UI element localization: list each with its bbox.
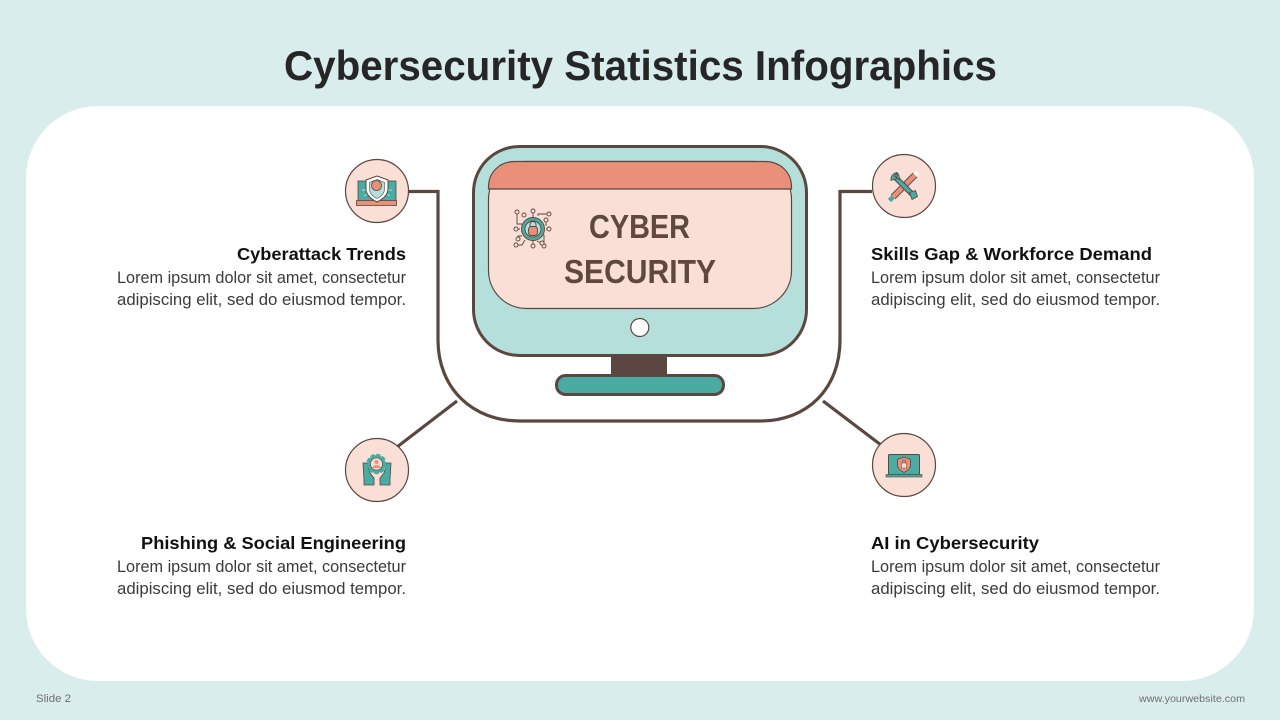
icon: hands holding gear: [346, 438, 408, 502]
monitor illustration: [474, 146, 806, 394]
text block: AI in Cybersecurity: [871, 533, 1160, 598]
panel: main white card: [26, 106, 1254, 681]
text block: Cyberattack Trends: Lorem ipsum dolor sit amet, consectetur: [117, 269, 406, 287]
text block: Cyberattack Trends: adipiscing elit, sed do eiusmod tempor.: [117, 291, 406, 309]
icon: laptop shield: [346, 160, 408, 222]
footer: slide number: Slide 2: [36, 693, 71, 705]
icon: laptop with padlock shield: [872, 434, 936, 496]
monitor body: [474, 146, 806, 356]
icon: circuit padlock: [514, 209, 551, 248]
power button: [631, 318, 649, 336]
text block: Skills Gap & Workforce Demand: Lorem ipsum dolor sit amet, consectetur: [871, 269, 1160, 287]
monitor stand base: [556, 376, 724, 394]
text block: Phishing & Social Engineering: adipiscing elit, sed do eiusmod tempor.: [117, 580, 406, 598]
screen label: [564, 208, 716, 290]
text block: Phishing & Social Engineering: Phishing & Social Engineering: [141, 533, 406, 553]
text block: AI in Cybersecurity: adipiscing elit, sed do eiusmod tempor.: [871, 580, 1160, 598]
footer: website: www.yourwebsite.com: [1138, 694, 1245, 705]
text block: Skills Gap & Workforce Demand: Skills Gap & Workforce Demand: [871, 244, 1152, 264]
title: Cybersecurity Statistics Infographics: [284, 42, 997, 89]
text block: Phishing & Social Engineering: Lorem ipsum dolor sit amet, consectetur: [117, 558, 406, 576]
screen label: CYBER: [589, 208, 690, 245]
text block: Phishing & Social Engineering: [117, 533, 406, 598]
screen label: SECURITY: [564, 253, 716, 290]
icon: wrench and pencil: [872, 154, 936, 218]
text block: Skills Gap & Workforce Demand: [871, 244, 1160, 309]
text block: Cyberattack Trends: Cyberattack Trends: [237, 244, 406, 264]
screen: [488, 162, 792, 308]
monitor stand neck: [611, 354, 667, 378]
text block: AI in Cybersecurity: AI in Cybersecurity: [871, 533, 1039, 553]
text block: Skills Gap & Workforce Demand: adipiscing elit, sed do eiusmod tempor.: [871, 291, 1160, 309]
screen header bar: [488, 162, 792, 189]
text block: AI in Cybersecurity: Lorem ipsum dolor sit amet, consectetur: [871, 558, 1160, 576]
text block: Cyberattack Trends: [117, 244, 406, 309]
connector lines: [397, 192, 881, 447]
